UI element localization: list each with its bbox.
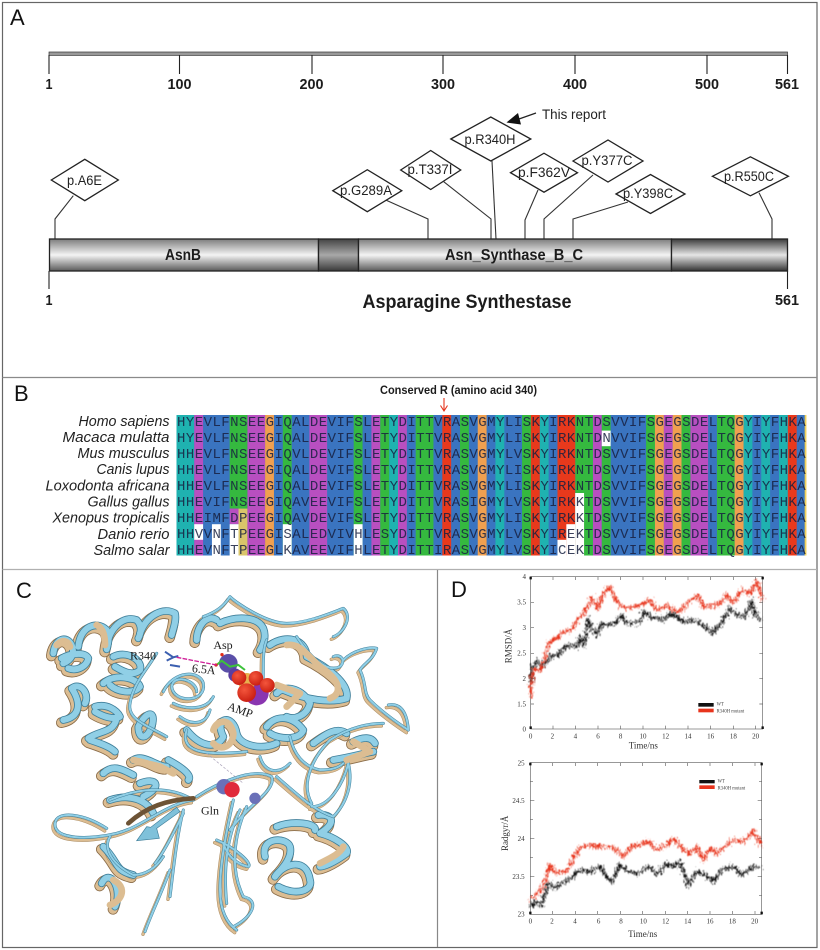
position ruler: 200 bbox=[300, 76, 324, 93]
line chart: RMSD: WT bbox=[717, 703, 724, 708]
alignment residues: HHEIMFDPEEGIQAVDEVIFSLETYDITTVRASVGMYLISKYIRKKTDSVVIFSGEGSDELTQGYIYFHKA bbox=[177, 511, 806, 527]
line chart: Radgyr: 0 bbox=[529, 918, 533, 926]
line chart: RMSD: 12 bbox=[662, 733, 670, 741]
panel letter B: B bbox=[14, 381, 29, 406]
variant: p.T337I: p.T337I bbox=[408, 162, 452, 177]
line chart: RMSD: 2 bbox=[551, 733, 555, 741]
variant: p.F362V: p.F362V bbox=[518, 165, 570, 180]
alignment residues bbox=[177, 415, 806, 559]
position ruler: 500 bbox=[695, 76, 719, 93]
line chart: RMSD: 6 bbox=[596, 733, 600, 741]
tan foreground segments bbox=[57, 625, 370, 905]
structure labels: Asp bbox=[213, 638, 233, 652]
species labels: Loxodonta africana bbox=[46, 478, 170, 494]
line chart: Radgyr: 8 bbox=[619, 918, 623, 926]
tan ribbon bbox=[51, 599, 406, 934]
variant: p.A6E bbox=[51, 159, 118, 201]
line chart: RMSD: 0 bbox=[522, 725, 526, 733]
line chart: Radgyr: 10 bbox=[640, 918, 647, 926]
line chart: Radgyr: 24.5 bbox=[512, 797, 525, 805]
ligand: Gln spheres bbox=[216, 779, 261, 804]
line chart: RMSD: 10 bbox=[640, 733, 647, 741]
protein domain bar: Asn_Synthase_B_C bbox=[445, 247, 583, 264]
line chart: RMSD: 16 bbox=[707, 733, 715, 741]
alignment residues: HHEVLFNSEEGIQALDEVIFSLETYDITTVRASVGMYLISKYIRKNTDSVVIFSGEGSDELTQGYIYFHKA bbox=[177, 479, 806, 495]
variant: p.Y377C: p.Y377C bbox=[582, 153, 633, 168]
callout: this report bbox=[506, 107, 606, 124]
line chart: Radgyr: 18 bbox=[729, 918, 736, 926]
line chart: Radgyr: 24 bbox=[518, 835, 525, 843]
line chart: Radgyr: WT bbox=[718, 779, 725, 784]
line chart: RMSD: RMSD/Å bbox=[503, 628, 513, 663]
panel: D molecular dynamics charts bbox=[451, 573, 763, 939]
position ruler: 400 bbox=[563, 76, 587, 93]
position ruler: 300 bbox=[431, 76, 455, 93]
alignment residues: HHVVNFTPEEGISALEDVIVHLESYDITTVRASVGMYLVSKYIREKTDSVVIFSGEGSDELTQGYIYFHKA bbox=[177, 527, 806, 543]
line chart: Radgyr: 6 bbox=[597, 918, 601, 926]
alignment residues: HHEVLFNSEEGIQALDEVIFSLETYDITTVRASVGMYLISKYIRKNTDSVVIFSGEGSDELTQGYIYFHKA bbox=[177, 463, 806, 479]
line chart: RMSD: 8 bbox=[619, 733, 623, 741]
panel: B sequence alignment bbox=[14, 381, 806, 559]
position ruler: 1 bbox=[46, 76, 52, 93]
line chart: RMSD: R340H mutant bbox=[717, 710, 745, 715]
variant: p.Y398C: p.Y398C bbox=[623, 186, 673, 201]
variant: p.R550C: p.R550C bbox=[724, 169, 774, 184]
line chart: RMSD: 0 bbox=[529, 733, 533, 741]
line chart: Radgyr: Time/ns bbox=[628, 929, 658, 939]
line chart: Radgyr: 4 bbox=[573, 918, 577, 926]
species labels: Danio rerio bbox=[98, 526, 170, 543]
panel letter D: D bbox=[451, 577, 467, 602]
structure labels: 6.5A bbox=[191, 661, 217, 677]
alignment residues: HYEVLFNSEEGIQALDEVIFSLETYDITTVRASVGMYLISKYIRKNTDNVVIFSGEGSDELTQGYIYFHKA bbox=[177, 431, 806, 447]
structure labels: AMP bbox=[226, 699, 255, 721]
variant: p.A6E: p.A6E bbox=[67, 173, 102, 188]
structure labels: Gln bbox=[201, 803, 219, 817]
species labels bbox=[46, 413, 170, 559]
line chart: RMSD: 18 bbox=[730, 733, 737, 741]
protein name: Asparagine Synthestase bbox=[362, 292, 572, 313]
ribbon model bbox=[51, 597, 408, 934]
line chart: Radgyr: 16 bbox=[707, 918, 714, 926]
line chart: Radgyr: 20 bbox=[751, 918, 759, 926]
bar end markers: 561 bbox=[775, 292, 799, 309]
distance line bbox=[177, 657, 217, 665]
line chart: RMSD: Time/ns bbox=[629, 741, 658, 751]
line chart: Radgyr bbox=[500, 759, 762, 939]
line chart: RMSD: 20 bbox=[752, 733, 760, 741]
species labels: Mus musculus bbox=[78, 445, 170, 462]
blue ribbon bbox=[53, 597, 408, 932]
panel letter A: A bbox=[10, 5, 25, 30]
species labels: Macaca mulatta bbox=[62, 429, 170, 446]
species labels: Canis lupus bbox=[96, 461, 170, 478]
line chart: RMSD: 2.5 bbox=[517, 650, 527, 658]
bar end markers: 1 bbox=[46, 292, 52, 309]
panel: A protein schematic bbox=[10, 5, 799, 313]
variant: p.R340H bbox=[451, 117, 531, 161]
structure labels: R340 bbox=[130, 648, 156, 662]
dark beta sheet bbox=[128, 798, 193, 823]
panel: C protein structure bbox=[16, 578, 408, 934]
variant: p.G289A bbox=[333, 170, 402, 212]
variant: p.R340H: p.R340H bbox=[464, 132, 516, 147]
ligand: Asp sticks bbox=[214, 653, 245, 670]
species labels: Gallus gallus bbox=[88, 494, 170, 510]
residue R340 sticks bbox=[165, 652, 180, 667]
variant: p.G289A: p.G289A bbox=[340, 183, 392, 198]
variant: p.Y398C bbox=[616, 174, 685, 214]
structure labels bbox=[130, 638, 255, 817]
position ruler: 561 bbox=[775, 76, 799, 93]
line chart: RMSD: 4 bbox=[574, 733, 578, 741]
variant: p.F362V bbox=[510, 153, 578, 192]
line chart: Radgyr: 23.5 bbox=[512, 873, 525, 881]
alignment residues: HHEVLFNSEEGIQVLDEVIFSLETYDITTVRASVGMYLVSKYIRKNTDSVVIFSGEGSDELTQGYIYFHKA bbox=[177, 447, 806, 463]
line chart: RMSD: 3 bbox=[522, 624, 526, 632]
line chart: Radgyr: 12 bbox=[662, 918, 670, 926]
callout: this report: This report bbox=[542, 107, 606, 122]
protein domain bar: AsnB bbox=[165, 247, 201, 264]
alignment residues: HHEVIFNSEEGIQAVEEVIFSLETYDITTVRASIGMYLVSKYIRKKTDSVVIFSGEGSDELTQGYIYFHKA bbox=[177, 495, 806, 511]
ligand: AMP spheres bbox=[219, 654, 275, 705]
line chart: RMSD: 2 bbox=[522, 675, 526, 683]
line chart: Radgyr: 14 bbox=[684, 918, 692, 926]
variant stems bbox=[55, 161, 772, 239]
bar end markers bbox=[46, 271, 799, 309]
blue sheet arrow bbox=[137, 807, 180, 841]
line chart: Radgyr: 23 bbox=[518, 911, 525, 919]
position ruler: 100 bbox=[168, 76, 192, 93]
species labels: Xenopus tropicalis bbox=[52, 510, 170, 526]
line chart: RMSD: 4 bbox=[522, 573, 526, 581]
species labels: Salmo salar bbox=[94, 542, 170, 559]
line chart: Radgyr: Radgyr/Å bbox=[500, 815, 510, 851]
faint distance line to Gln bbox=[207, 753, 243, 783]
conserved residue callout: Conserved R (amino acid 340) bbox=[380, 385, 537, 397]
panel letter C: C bbox=[16, 578, 32, 603]
alignment colour columns bbox=[176, 415, 806, 556]
species labels: Homo sapiens bbox=[78, 413, 170, 430]
line chart: RMSD bbox=[503, 573, 763, 751]
line chart: Radgyr: R340H mutant bbox=[718, 786, 746, 791]
line chart: Radgyr: 25 bbox=[518, 759, 525, 767]
line chart: RMSD: 14 bbox=[685, 733, 692, 741]
line chart: RMSD: 1.5 bbox=[517, 700, 527, 708]
alignment residues: HHEVNFTPEEGLKAVEEVIFHLETYDITTIRASVGMYLVSKYICEKTDSVVIFSGEGSDELTQGYIYFHKA bbox=[177, 543, 806, 559]
position ruler bbox=[46, 52, 799, 93]
protein domain bar bbox=[50, 239, 788, 271]
variant: p.Y377C bbox=[573, 140, 643, 182]
conserved residue callout bbox=[380, 385, 537, 411]
line chart: Radgyr: 2 bbox=[550, 918, 554, 926]
line chart: RMSD: 3.5 bbox=[517, 599, 527, 607]
variant: p.T337I bbox=[401, 150, 461, 190]
variant: p.R550C bbox=[712, 157, 788, 196]
alignment residues: HYEVLFNSEEGIQALDEVIFSLETYDITTVRASVGMYLISKYIRKNTDSVVIFSGEGSDELTQGYIYFHKA bbox=[177, 415, 806, 431]
